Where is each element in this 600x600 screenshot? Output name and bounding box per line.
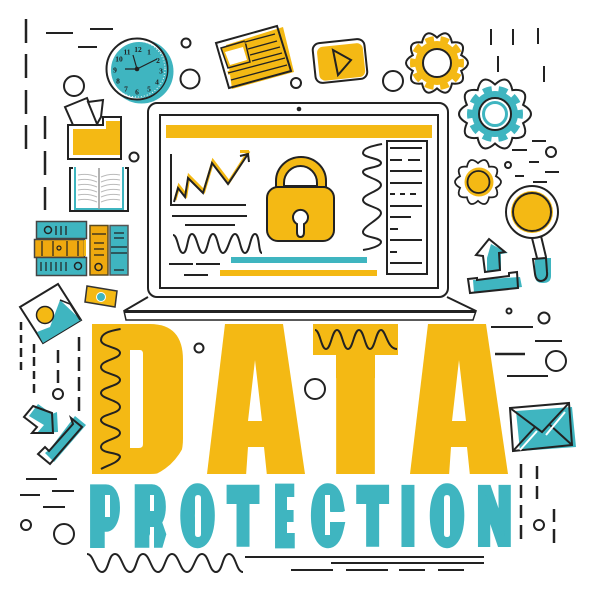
screen wave [173,234,262,253]
bottom wave [87,554,243,572]
icon: folder with papers [65,98,122,159]
yellow bar [220,270,377,276]
icon: clock: 6 [135,88,139,96]
bottom lines [245,557,484,570]
scattered circles [21,38,566,544]
icon: clock: 12 [134,45,142,54]
icon: clock: 9 [113,66,117,74]
heading: PROTECTION: TI [359,475,414,558]
icon: clock: 2 [156,56,160,65]
icon: photo [20,284,81,343]
laptop lid [148,103,448,297]
icon: clock [106,38,174,104]
screen [160,115,438,288]
icon: video play button [312,38,368,84]
decorative circles in heading [194,344,325,399]
webcam [297,107,301,111]
padlock icon [267,157,334,241]
heading: PROTECTION [92,475,511,558]
short lines [169,264,220,275]
upright teal binder [110,226,128,275]
upright orange binder [90,226,108,275]
heading: PROTECTION: N [478,475,511,558]
document panel [387,141,427,274]
icon: yellow gear [406,33,468,93]
icon: upload arrow [468,239,522,293]
screen vertical wave [363,144,382,250]
icon: open book [70,167,128,211]
middle binder [34,240,86,258]
bottom binder [36,258,86,276]
icon: clock: 3 [159,66,163,76]
icon: clock: 1 [147,48,151,56]
text lines below chart [172,216,247,225]
icon: teal gear [459,80,531,148]
heading: PROTECTION: E [277,479,292,554]
heading: DATA: A [227,325,285,481]
heading: PROTECTION: O [433,479,461,554]
heading: PROTECTION: T [229,475,257,558]
icon: clock: 5 [147,84,151,94]
icon: clock: 7 [124,84,128,94]
icon: clock: 8 [116,76,120,86]
icon: download tray [38,416,86,464]
icon: clock: 4 [155,78,159,86]
icon: clock: 10 [115,54,123,64]
teal bar [231,257,367,263]
laptop [124,103,476,320]
heading: DATA: D [90,297,183,493]
scattered dashes [20,19,562,543]
line chart [171,150,249,205]
laptop base [124,297,476,320]
icon: download arrow [24,404,58,433]
heading: DATA: A [430,325,488,481]
screen top bar [166,125,432,138]
icon: envelope [510,403,576,451]
heading: DATA: T [323,303,388,495]
icon: small gear [455,160,501,204]
heading: PROTECTION: PRO [92,479,212,554]
icon: clock: 11 [123,48,131,56]
heading: PROTECTION: C [314,479,340,554]
top binder [36,222,86,238]
icon: banknote [85,286,117,307]
icon: newspaper [216,26,294,89]
icon: magnifying glass [506,186,558,283]
icon: binders [34,222,128,276]
wave in letter T [315,330,397,349]
wave in letter D [101,329,121,469]
heading: DATA [92,324,508,474]
